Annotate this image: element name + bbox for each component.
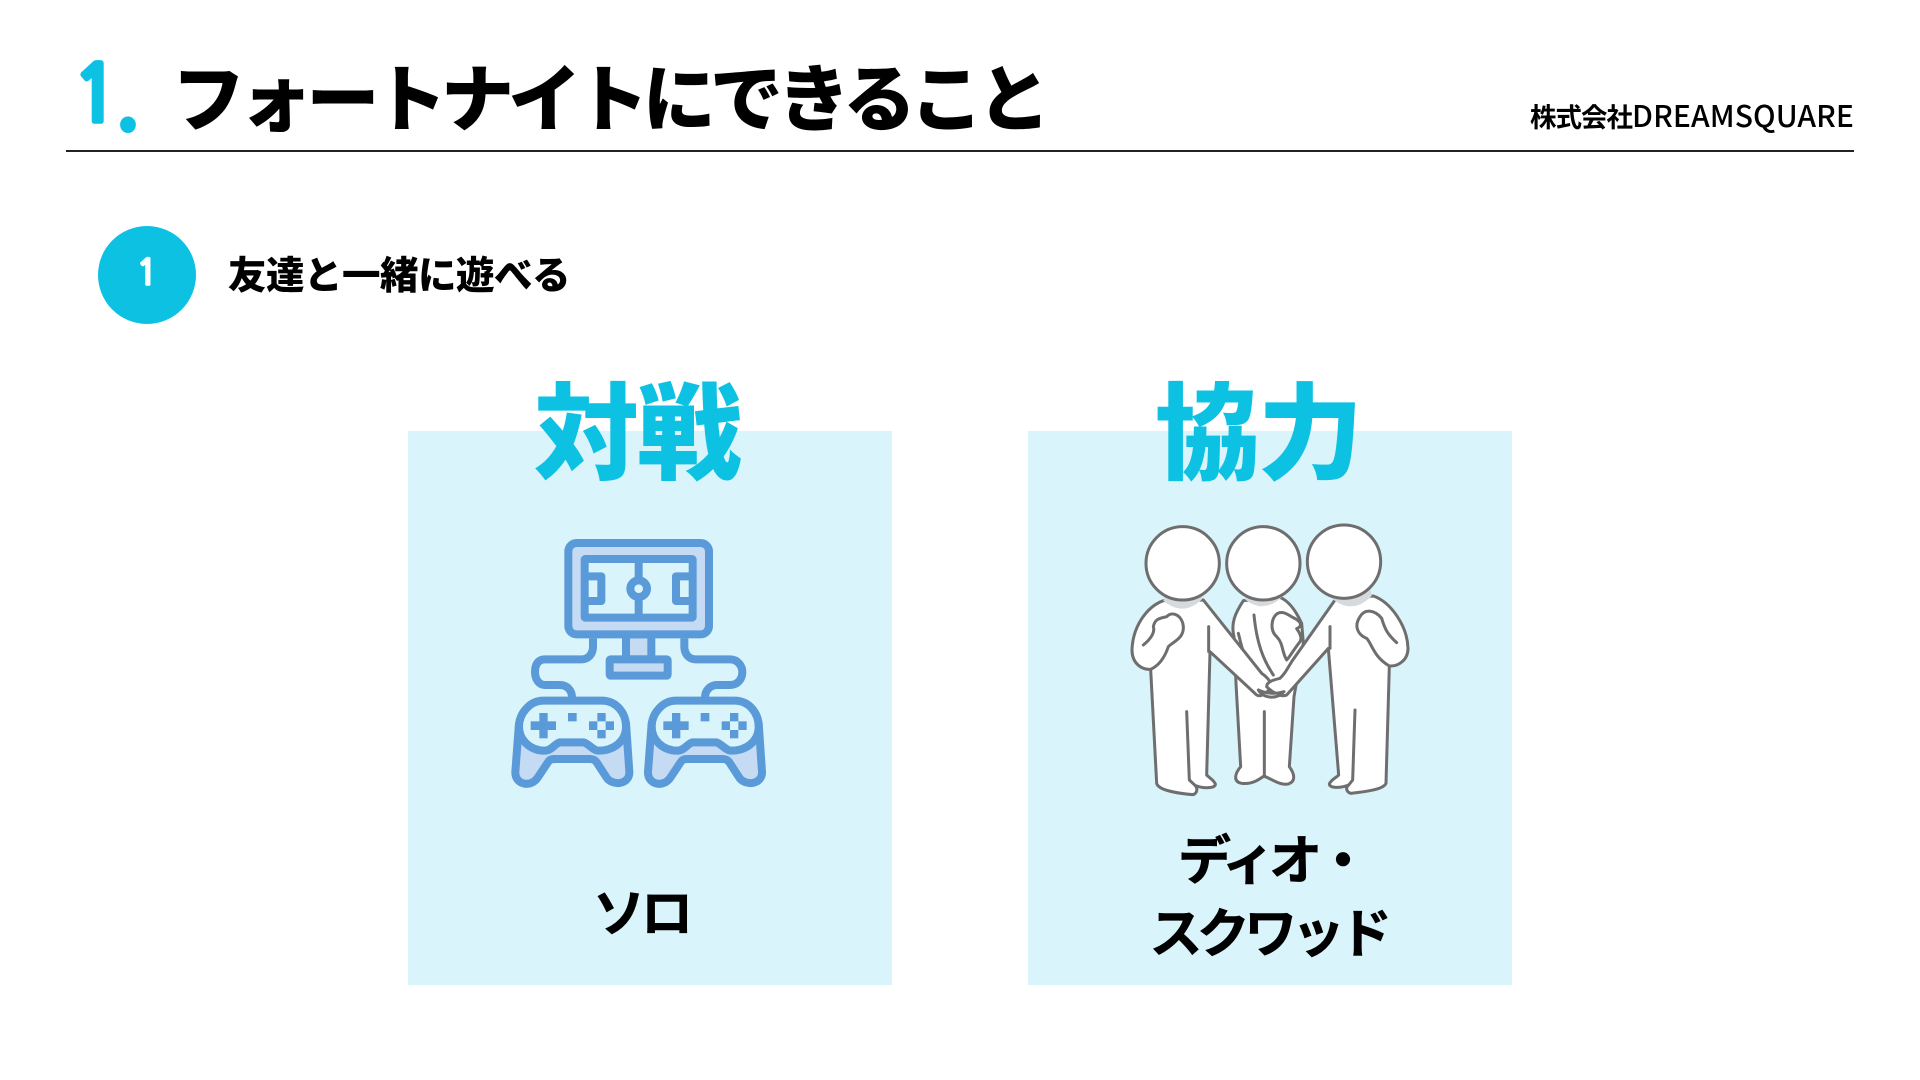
company name: 株式会社DREAMSQUARE [1530, 92, 1854, 136]
label: duo and squad: スクワッド [1150, 892, 1386, 968]
heading: battle: 対戦 [534, 350, 740, 502]
number badge [98, 226, 196, 324]
panel: battle [408, 431, 892, 985]
title dot: . [114, 32, 142, 157]
person: middle [1227, 527, 1303, 784]
label: duo and squad: ディオ・ [1178, 819, 1364, 895]
number badge: 1 [136, 256, 158, 291]
label: duo and squad [1150, 819, 1388, 968]
header rule [66, 150, 1854, 152]
title text: フォートナイトにできること [172, 41, 1045, 147]
subheading: 友達と一緒に遊べる [228, 245, 570, 301]
label: solo: ソロ [593, 872, 689, 947]
panel: cooperation [1028, 431, 1512, 985]
title [72, 32, 1045, 157]
heading: cooperation: 協力 [1155, 350, 1361, 502]
icon: three people with joined hands [1130, 524, 1410, 796]
person: left [1132, 527, 1271, 795]
person: right [1267, 525, 1408, 793]
joined hands [1258, 690, 1284, 697]
icon: monitor and two game controllers [511, 539, 766, 788]
title number: 1 [72, 56, 120, 134]
